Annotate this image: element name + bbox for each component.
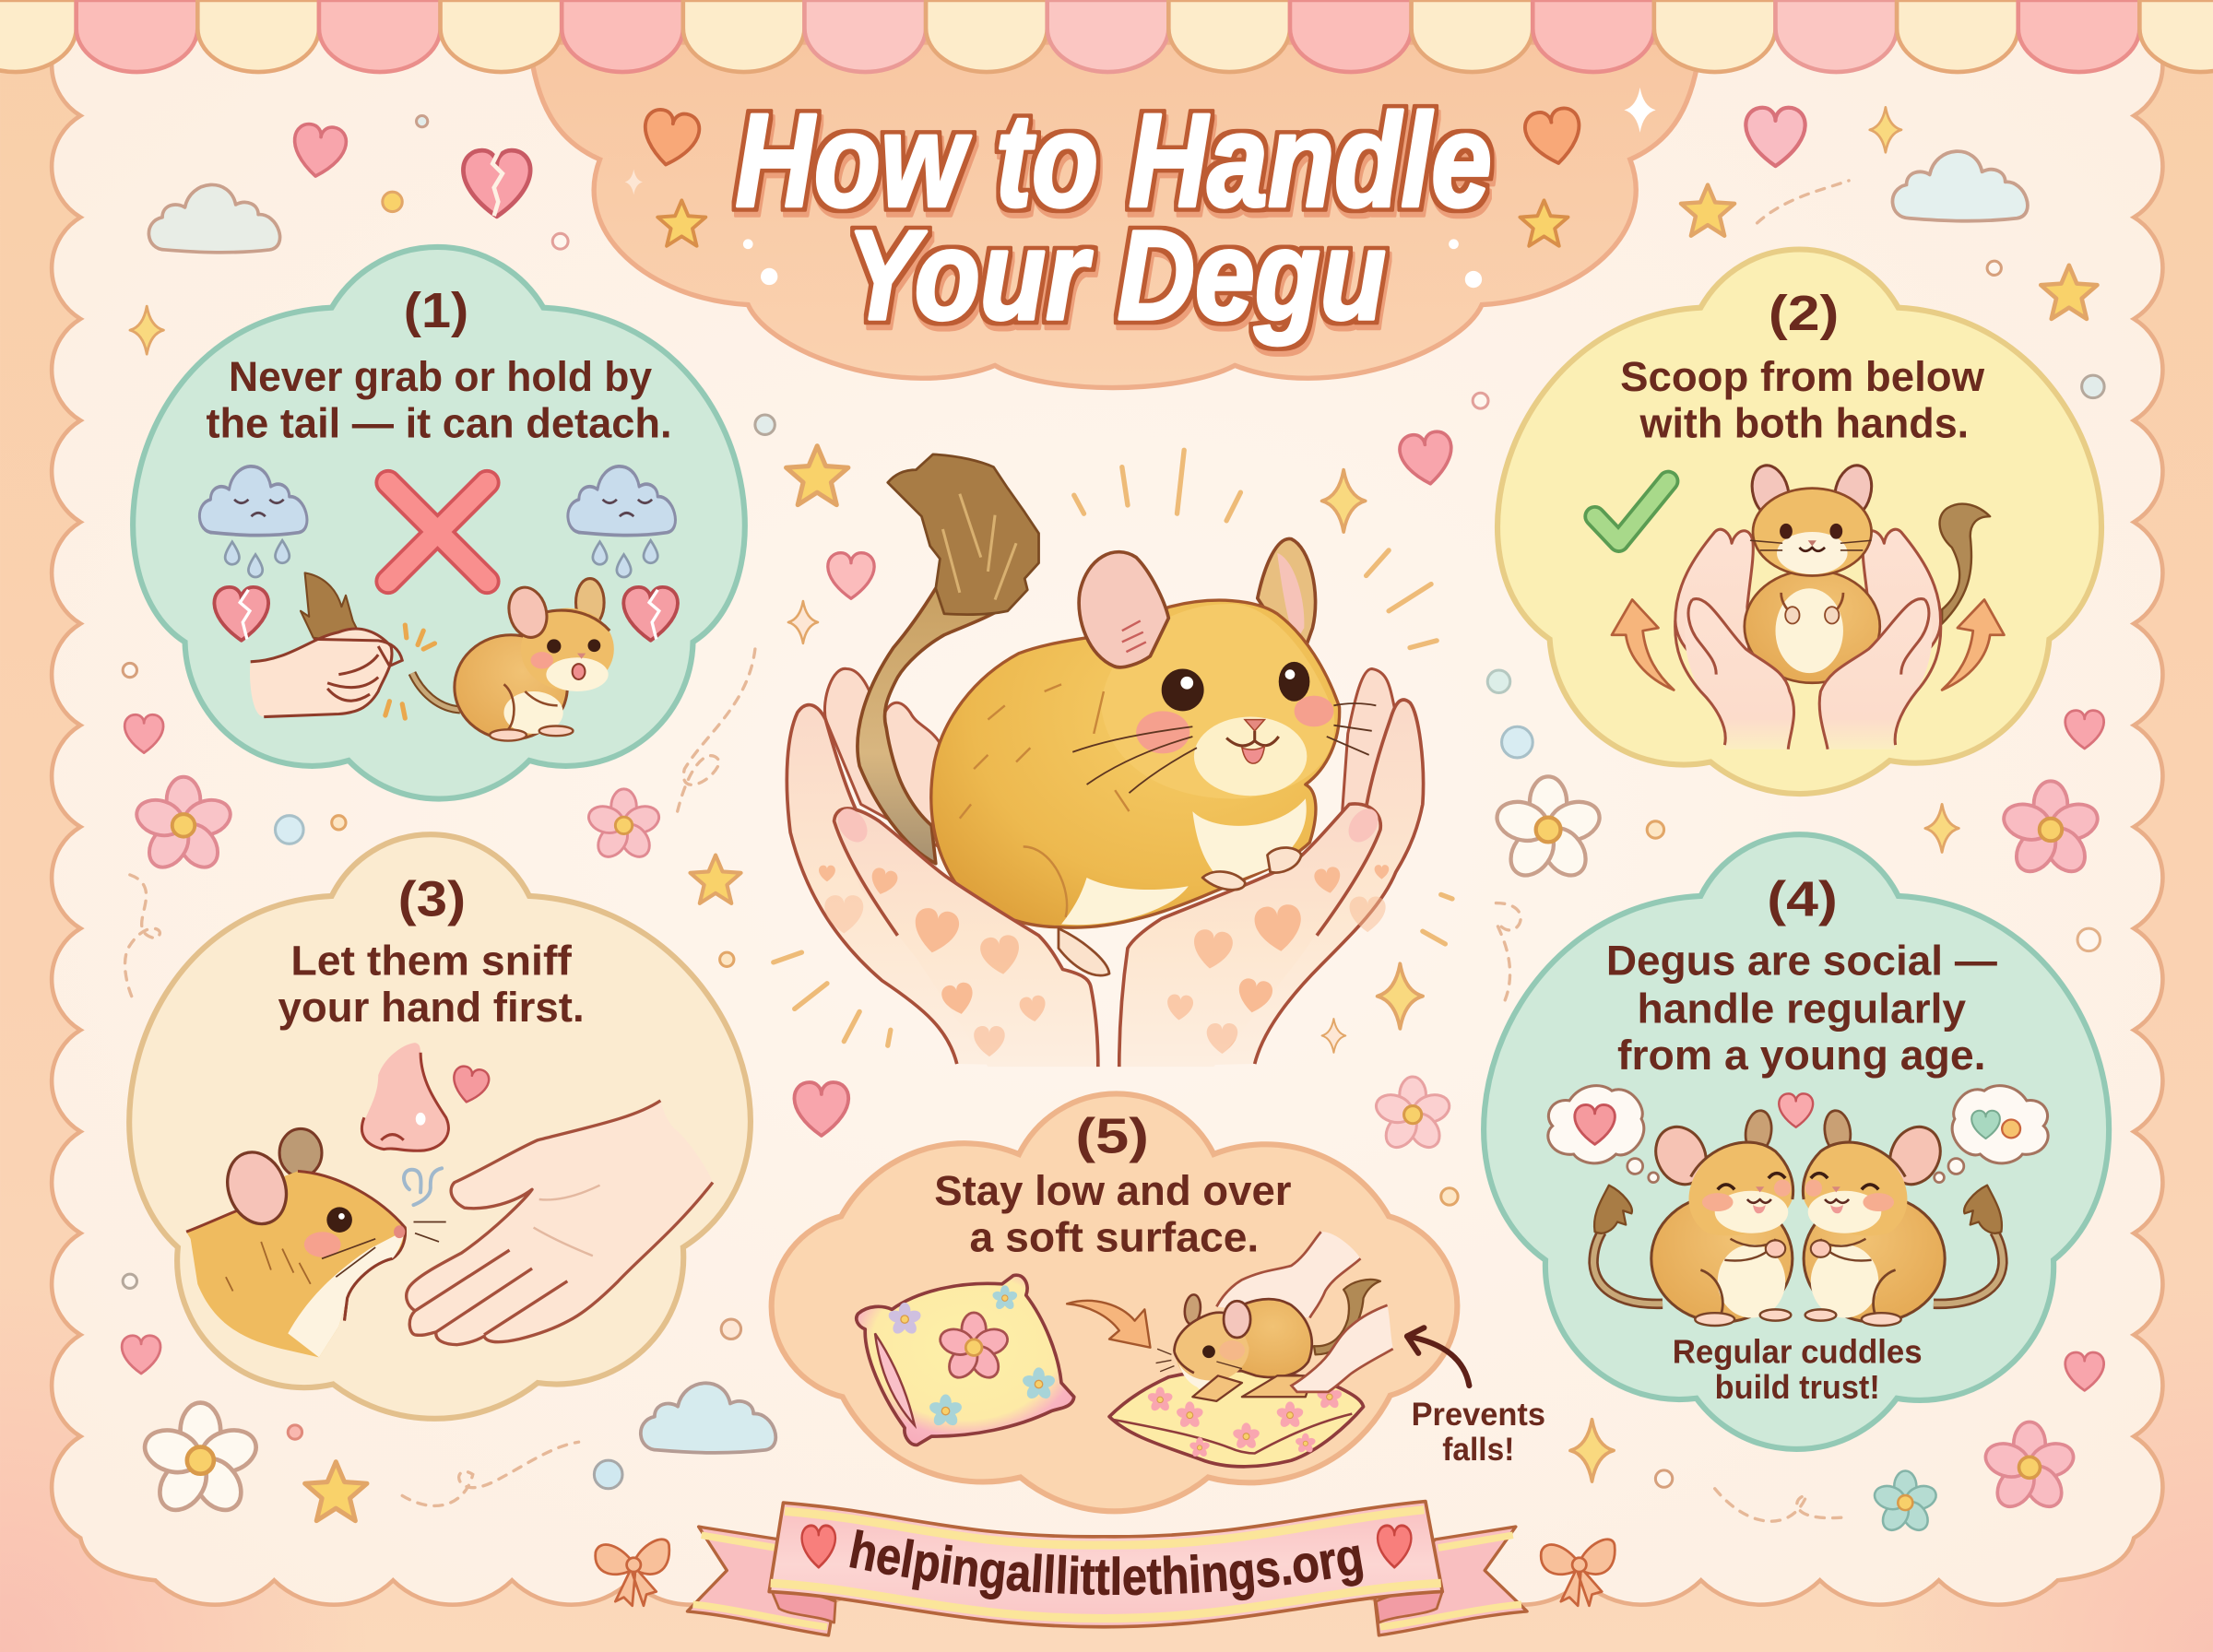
ribbon tails [687,1527,1527,1635]
right hand [1119,700,1424,1067]
main ribbon [769,1502,1442,1627]
whiskers [1072,703,1376,793]
pillow left [857,1275,1074,1445]
step 2 text: with both hands. [1639,399,1969,446]
decorative dots [123,116,2104,1489]
nose and mouth [1226,720,1279,763]
lower guiding hand [1292,1305,1393,1392]
degu body [931,600,1340,927]
lower palm hearts [868,866,1343,1056]
sparkle rays [774,450,1452,1045]
step 1 text: Never grab or hold by [229,353,652,400]
title heading [735,87,1492,347]
icon: broken heart [463,149,530,217]
arrow to pillow [1067,1301,1150,1348]
paws and foot [1059,847,1301,975]
ribbon hearts [802,1526,1411,1567]
step 3 text [278,872,585,1031]
degu held up [1745,461,1880,683]
back fingers [824,668,1397,846]
eyes [1162,662,1309,711]
step 3 text: your hand first. [278,984,585,1031]
url text: helpingalllittlethings.org [849,1529,1363,1600]
title decorations [625,88,1656,288]
step 2 text: (2) [1769,287,1839,341]
step 1 text [206,284,672,446]
icon: heart between degus [1779,1093,1813,1127]
title cloud [529,42,1700,388]
degu on pillow [1156,1280,1380,1401]
caption: build trust! [1715,1368,1880,1406]
right scooping palm [1819,599,1941,749]
panel 2: scoop from below [1497,249,2101,794]
panel 4: degus are social [1484,834,2109,1449]
palm hearts [819,865,1389,1056]
head lighter area [1101,604,1334,798]
step 5 text: (5) [1075,1109,1149,1163]
arrow up left [1612,599,1674,690]
step 4 text: Degus are social — [1606,938,1998,985]
cuddling degu right [1803,1109,2003,1326]
decorative sparkles [130,107,1959,1481]
caption [1673,1333,1923,1406]
left hand [787,705,1096,1067]
cheeks [1136,696,1333,753]
decorative stars [305,185,2097,1521]
step 1 text: the tail — it can detach. [206,399,672,446]
impact lines [385,625,434,718]
decorative hearts [122,108,2104,1390]
step 5 text: a soft surface. [970,1214,1259,1261]
awning scallops [0,0,2213,72]
thought bubble right [1935,1086,2048,1183]
hand grabbing the tail [250,572,402,717]
arrow up right [1942,599,2004,690]
bow left [596,1540,669,1606]
callout: prevents falls: falls! [1442,1432,1514,1468]
caption: Regular cuddles [1673,1333,1923,1371]
step 4 text: from a young age. [1617,1032,1986,1079]
icon: sad cloud right [568,466,675,577]
dashed flourishes [125,181,1849,1521]
panel 3: let them sniff [129,834,751,1419]
central illustration: degu in hands [787,454,1424,1067]
left scooping palm [1675,599,1794,749]
degu running away [412,579,614,741]
pillow right [1109,1371,1364,1467]
step 1 text: (1) [404,284,468,338]
open hand [407,1101,713,1345]
hand backs [1675,529,1941,678]
thought bubble left [1548,1086,1658,1183]
callout: prevents falls: Prevents [1412,1397,1545,1433]
degu tail [858,454,1039,864]
belly patches [1061,798,1307,925]
cuddling degu left [1593,1109,1793,1326]
banner ribbon [686,1499,1529,1637]
step 4 text: (4) [1767,872,1838,926]
step 5 text: Stay low and over [934,1167,1292,1214]
decorative flowers [132,776,2102,1535]
step 3 text: Let them sniff [290,938,573,985]
sniff breath lines [404,1168,442,1205]
degu left ear [1079,552,1168,667]
degu right ear [1258,538,1316,652]
step 5 text [934,1109,1292,1261]
panel 5: stay low [772,1093,1457,1511]
step 4 text: handle regularly [1637,985,1966,1032]
panel 1: never grab the tail [133,247,745,799]
callout: prevents falls [1407,1328,1545,1468]
muzzle [1194,717,1307,796]
decorative clouds [148,151,2028,1453]
icon: sad cloud left [199,466,307,577]
upper guiding hand [1216,1232,1361,1318]
icon: broken heart left [214,587,268,641]
step 2 text [1620,287,1985,446]
icon: red cross [388,482,487,582]
fur strokes [960,684,1129,917]
icon: broken heart right [623,587,678,641]
bow right [1541,1540,1615,1606]
icon: small heart [449,1065,491,1105]
step 4 text [1606,872,1998,1079]
title heading: How to Handle [735,87,1492,234]
step 2 text: Scoop from below [1620,353,1985,400]
tail [1940,504,1990,624]
yellow ribbon stripes [771,1510,1441,1619]
step 3 text: (3) [398,872,466,926]
icon: green check [1595,481,1668,542]
degu head sniffing [186,1128,446,1357]
thumbs [832,803,1384,1067]
title heading: Your Degu [846,205,1386,347]
icon: nose [361,1043,448,1150]
